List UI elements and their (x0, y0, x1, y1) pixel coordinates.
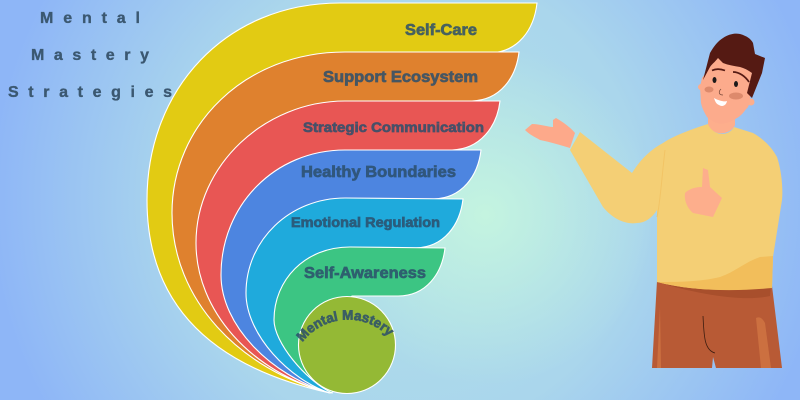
hair (703, 34, 765, 98)
sweater hem shade (657, 256, 773, 290)
waist shadow (657, 282, 771, 298)
label: emotional regulation: Emotional Regulation (291, 214, 440, 230)
eyebrows (712, 69, 749, 82)
layer: self-awareness (274, 247, 445, 393)
sleeve crease (657, 150, 665, 217)
left ear (698, 84, 704, 90)
sweater body and arm (570, 124, 782, 290)
label: self-care: Self-Care (405, 22, 477, 39)
trouser highlight left (657, 307, 661, 368)
neck (708, 110, 735, 133)
blue band (221, 150, 481, 393)
orange band (172, 52, 519, 393)
trousers (652, 281, 782, 368)
curved label: mental mastery: Mental Mastery (296, 310, 394, 342)
trouser legs (652, 281, 782, 368)
fly seam (703, 316, 715, 353)
nose (719, 89, 723, 95)
layered fan diagram (146, 2, 538, 394)
thumbs-up fist (685, 168, 722, 217)
left cheek (704, 86, 714, 92)
label: healthy boundaries: Healthy Boundaries (301, 164, 456, 181)
layer: strategic communication (196, 101, 500, 393)
core circle (298, 296, 396, 394)
core: mental mastery (296, 296, 396, 394)
right cheek (729, 92, 743, 100)
head (698, 34, 765, 124)
right ear (748, 98, 754, 106)
title line 1: Mental (40, 10, 140, 27)
right eye (734, 81, 738, 87)
person illustration (525, 34, 782, 368)
left eye (712, 77, 716, 83)
layer: emotional regulation (246, 198, 463, 393)
open hand (525, 118, 575, 148)
green band (274, 247, 445, 393)
face (700, 56, 752, 124)
trouser highlight right (756, 317, 771, 368)
cyan band (246, 198, 463, 393)
sweater (570, 124, 782, 290)
title (8, 10, 172, 101)
label: support ecosystem: Support Ecosystem (323, 69, 478, 86)
title line 2: Mastery (31, 47, 149, 64)
label: strategic communication: Strategic Communication (303, 119, 484, 135)
layer: healthy boundaries (221, 150, 481, 393)
yellow band (147, 3, 537, 393)
smile (714, 98, 727, 106)
title line 3: Strategies (8, 84, 172, 101)
red band (196, 101, 500, 393)
label: self-awareness: Self-Awareness (304, 265, 426, 282)
